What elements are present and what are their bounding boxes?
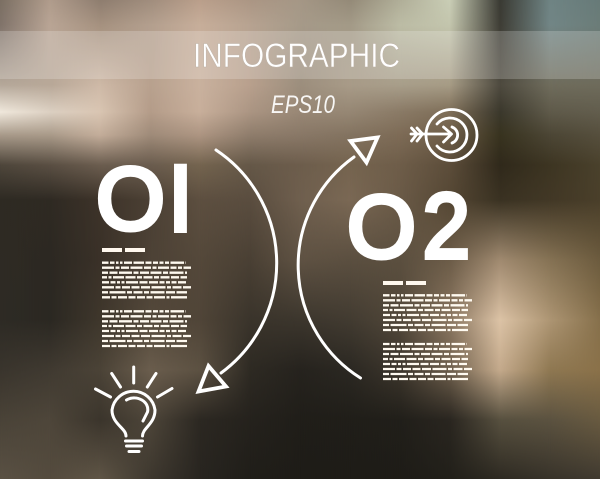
subtitle: EPS10 (271, 91, 335, 119)
text block: first paragraph (102, 263, 191, 297)
title: INFOGRAPHIC (193, 37, 400, 75)
number 02: O (347, 177, 416, 276)
heading placeholder dashes (102, 248, 145, 252)
text block: second paragraph (102, 311, 191, 346)
text block: first paragraph (383, 295, 472, 330)
number 02 (347, 174, 470, 277)
icon: light bulb (96, 367, 172, 452)
number 01: O (96, 149, 165, 248)
panel: step 01 (96, 146, 194, 452)
icon: target with arrow (411, 110, 477, 160)
heading placeholder dashes (383, 281, 426, 285)
number 01: I (167, 146, 194, 252)
panel: step 02 (347, 110, 477, 379)
text block: second paragraph (383, 344, 472, 379)
arrow: curved arrow from top down to bulb (198, 150, 277, 392)
number 01 (96, 146, 194, 252)
arrow: curved arrow from bottom up to target (298, 138, 378, 378)
number 02: 2 (423, 174, 470, 277)
title band (0, 31, 600, 79)
